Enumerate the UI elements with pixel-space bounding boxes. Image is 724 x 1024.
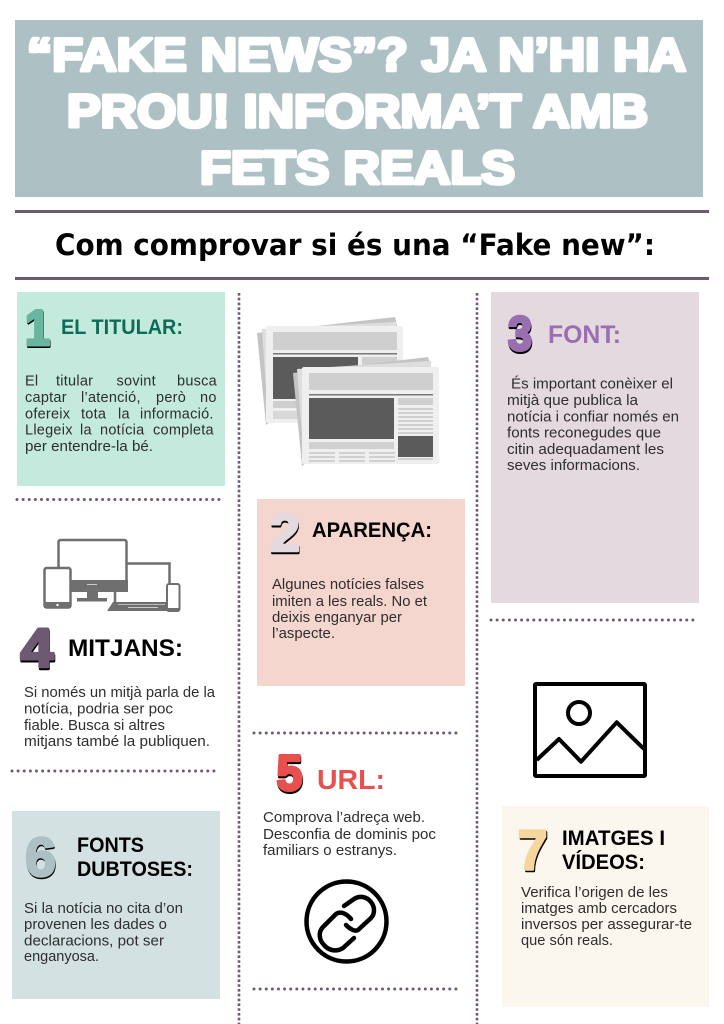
panel 5: url: Comprova l’adreça web. — [263, 810, 425, 826]
number 1: 1 — [26, 302, 50, 358]
number 5: 5 — [277, 747, 303, 803]
panel 1: el titular: notícia — [100, 422, 145, 438]
panel 2: aparença: deixis enganyar per — [272, 610, 402, 626]
icon: image placeholder — [535, 684, 645, 776]
panel 7: imatges i vídeos: VÍDEOS: — [562, 851, 645, 874]
panel 7: imatges i vídeos: que són reals. — [521, 933, 613, 949]
panel 3: font: notícia i confiar només en — [507, 410, 679, 426]
number 4: 4 — [21, 618, 54, 680]
panel 1: el titular: la — [118, 406, 130, 422]
panel 1: el titular: informació. — [140, 406, 214, 422]
panel 3: font: mitjà que publica la — [507, 393, 639, 409]
panel 3: font: citin adequadament les — [507, 442, 664, 458]
panel 1: el titular: Llegeix — [25, 422, 73, 438]
icon: chain link — [306, 882, 386, 962]
title banner: “FAKE NEWS”? JA N’HI HA — [27, 28, 686, 80]
number 1: 1 — [25, 300, 50, 356]
title banner: PROU! INFORMA’T AMB — [67, 85, 648, 137]
panel 4: mitjans: Si només un mitjà parla de la — [24, 685, 216, 701]
panel 1: el titular: EL TITULAR: — [61, 316, 183, 339]
panel 6: fonts dubtoses: declaracions, pot ser — [24, 934, 164, 950]
panel 3: font: És important conèixer el — [511, 376, 673, 392]
panel 2: aparença — [257, 499, 465, 686]
panel 1: el titular: però — [156, 390, 186, 406]
panel 7: imatges i vídeos: inversos per assegurar-te — [521, 917, 692, 933]
panel 1: el titular: la — [80, 422, 92, 438]
panel 1: el titular: ofereix — [25, 406, 71, 422]
panel 1: el titular: tota — [81, 406, 107, 422]
panel 7: imatges i vídeos — [502, 806, 709, 1007]
panel 2: aparença: l’aspecte. — [272, 626, 335, 642]
title banner: FETS REALS — [200, 142, 515, 194]
panel 5: url: URL: — [317, 764, 385, 795]
panel 7: imatges i vídeos: IMATGES I — [562, 827, 665, 850]
panel 3: font: FONT: — [548, 321, 621, 349]
panel 6: fonts dubtoses: DUBTOSES: — [77, 858, 193, 881]
panel 4: mitjans: mitjans també la publiquen. — [24, 734, 210, 750]
panel 6: fonts dubtoses: Si la notícia no cita d’on — [24, 901, 183, 917]
panel 1: el titular: completa — [153, 422, 215, 438]
number 2: 2 — [270, 505, 300, 565]
panel 1: el titular: titular — [56, 374, 93, 390]
icon: newspapers — [257, 317, 439, 466]
panel 1: el titular: l’atenció, — [81, 390, 141, 406]
number 2: 2 — [270, 503, 300, 563]
panel 6: fonts dubtoses — [12, 811, 220, 999]
number 7: 7 — [518, 818, 548, 882]
panel 2: aparença: APARENÇA: — [312, 519, 432, 542]
panel 4: mitjans: notícia, podria ser poc — [24, 702, 173, 718]
number 6: 6 — [25, 826, 56, 888]
number 5: 5 — [276, 745, 302, 801]
number 4: 4 — [20, 616, 54, 678]
panel 4: mitjans: fiable. Busca si altres — [24, 718, 165, 734]
panel 1: el titular: busca — [177, 374, 218, 390]
number 7: 7 — [518, 820, 548, 884]
panel 4: mitjans — [20, 616, 216, 750]
panel 3: font: seves informacions. — [507, 458, 640, 474]
panel 1: el titular: captar — [25, 390, 67, 406]
panel 3: font — [491, 292, 699, 603]
icon: devices — [44, 540, 180, 612]
panel 7: imatges i vídeos: imatges amb cercadors — [521, 901, 677, 917]
panel 1: el titular: per entendre-la bé. — [25, 439, 153, 455]
number 3: 3 — [508, 310, 532, 363]
panel 5: url — [263, 745, 436, 859]
panel 5: url: Desconfia de dominis poc — [263, 827, 436, 843]
panel 2: aparença: Algunes notícies falses — [272, 577, 424, 593]
panel 1: el titular — [17, 292, 225, 486]
panel 2: aparença: imiten a les reals. No et — [272, 594, 427, 610]
panel 6: fonts dubtoses: FONTS — [77, 834, 144, 857]
subtitle: Com comprovar si és una “Fake new”: — [55, 228, 655, 262]
title banner — [15, 20, 703, 197]
number 6: 6 — [26, 828, 56, 890]
panel 1: el titular: no — [200, 390, 217, 406]
panel 1: el titular: El — [25, 374, 38, 390]
panel 3: font: fonts reconegudes que — [507, 426, 661, 442]
number 3: 3 — [508, 308, 532, 361]
panel 5: url: familiars o estranys. — [263, 843, 397, 859]
panel 6: fonts dubtoses: provenen les dades o — [24, 917, 167, 933]
panel 7: imatges i vídeos: Verifica l’origen de les — [521, 885, 668, 901]
panel 6: fonts dubtoses: enganyosa. — [24, 949, 99, 965]
panel 1: el titular: sovint — [116, 374, 156, 390]
panel 4: mitjans: MITJANS: — [68, 635, 183, 662]
